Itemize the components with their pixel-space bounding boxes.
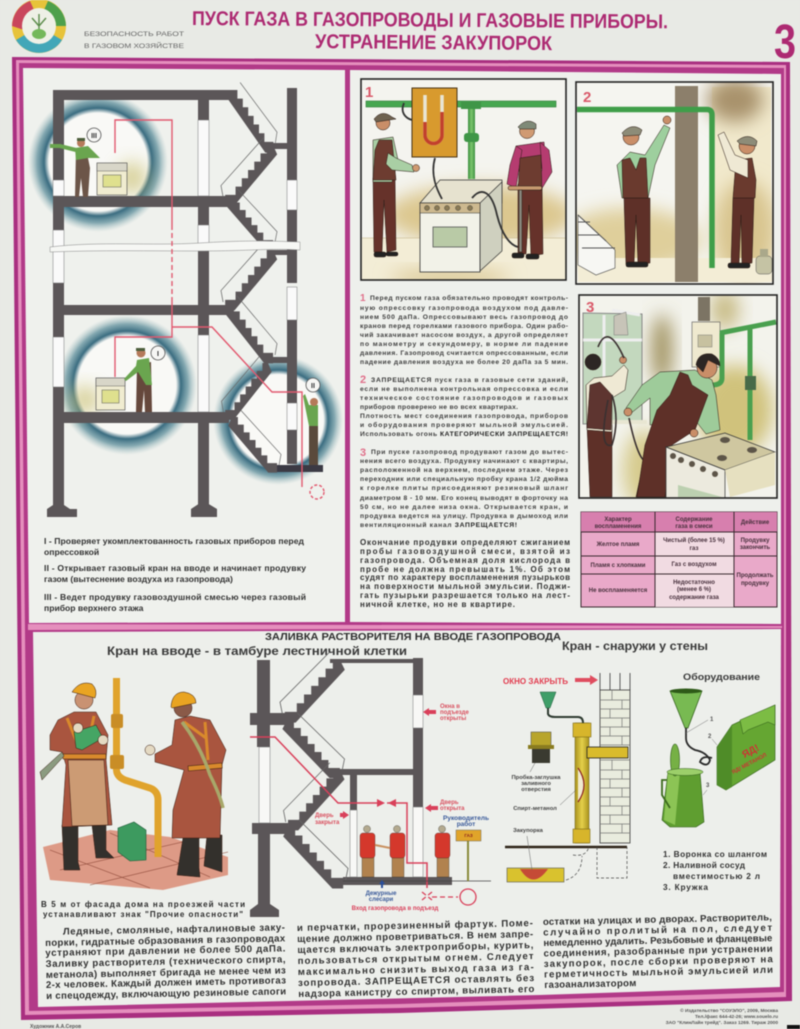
structure [47,88,323,517]
paragraph 3: переходник или специальную пробку крана 1/2 дюйма [360,475,568,483]
body text column 2 [297,918,535,1000]
window warning [503,675,598,686]
heading: valve at entrance: Кран на вводе - в тамбуре лестничной клетки [107,644,407,658]
equipment list [663,849,767,892]
labels: открыты [440,716,466,722]
table: flame characteristics: (менее 6 %) [677,587,711,593]
publisher imprint [666,1007,778,1026]
paragraph 4: пробе не должна превышать 1%. Об этом [360,565,570,574]
body text column 3 [543,912,774,991]
panel: instructions [350,70,781,624]
labels: работ [457,820,475,828]
plug [528,732,554,763]
worker right [507,121,552,259]
pipe valve [745,376,756,390]
pipe fittings [110,714,124,769]
illustration: outside riser through wall [505,673,630,882]
body text column 3: соединения, разобранные при устранении [543,944,773,959]
divider [28,624,782,630]
body text column 1: устраняют при давлении не более 500 даПа. [45,943,285,959]
left worker [40,683,114,870]
captions I-III: III - Ведет продувку газовоздушной смесью через газовый [44,592,306,602]
paragraph 1: чий закачивает насосом воздух, а другой определяет [360,331,569,339]
body text column 3: остатки на улицах и во дворах. Растворитель, [543,912,772,928]
body text column 1: 2-х человек. Каждый должен иметь противогаз [46,975,286,991]
table: flame characteristics: Содержание [676,517,713,523]
canister [118,822,146,861]
table: flame characteristics: Газ с воздухом [671,562,717,568]
paragraph 2: 2 [360,374,366,386]
highlight: apartment I [57,315,197,455]
labels: Дверь [315,813,334,819]
publisher imprint: ЗАО "КлинЛайн трейд". Заказ 1269. Тираж 2000 [666,1019,778,1026]
publisher imprint: © Издательство "СОУЭЛО", 2009, Москва [680,1007,778,1014]
ground line [343,880,491,882]
title: УСТРАНЕНИЕ ЗАКУПОРОК [315,31,553,55]
body text column 3: газоанализатором [544,978,636,991]
worker I [124,348,152,412]
body text column 2: зопровода. ЗАПРЕЩАЕТСЯ оставлять без [298,973,534,989]
note about sign [41,900,245,919]
labels: закрыта [315,820,340,826]
labels: Руководитель [443,815,489,822]
paragraph 3: 3 [360,447,366,459]
captions I-III: газом (вытеснение воздуха из газопровода) [44,574,233,584]
series label: В ГАЗОВОМ ХОЗЯЙСТВЕ [84,42,184,50]
paragraph 2: если не выполнена контрольная опрессовка и если [360,386,568,393]
captions I-III: прибор верхнего этажа [44,603,144,613]
paragraph 2 [360,374,568,438]
paragraph 1: Перед пуском газа обязательно проводят контроль- [370,294,568,302]
water heater [692,297,720,367]
warning sign: ГАЗ [464,833,473,838]
captions I-III: опрессовкой [44,547,99,557]
note about sign: устанавливают знак "Прочие опасности" [43,910,243,919]
body text column 1 [45,922,287,1002]
paragraph 1: давления. Газопровод считается опрессованным, если [360,350,568,357]
marker II [306,378,320,392]
body text column 3: закупорок, после сборки проверяют на [544,954,774,970]
table: flame characteristics: газа в смеси [675,524,713,530]
mug [662,744,704,827]
labels: подъезде [440,710,469,716]
door closed arrow [340,811,349,819]
ground [505,846,627,848]
panel: solvent filling [33,629,781,1007]
series label [84,31,184,50]
paragraph 2: и оборудования проверяют мыльной эмульсией. [360,421,568,429]
yellow riser [573,723,628,843]
highlight: stairwell II [213,355,343,485]
captions I-III [44,536,306,613]
heading: solvent filling: ЗАЛИВКА РАСТВОРИТЕЛЯ НА ВВОДЕ ГАЗОПРОВОДА [265,631,561,643]
publisher imprint: Тел./факс 644-42-26; www.souelo.ru [695,1013,778,1020]
break line [50,241,300,252]
paragraph 4: ничной клетке, но не в квартире. [360,600,515,609]
illustration 2: connecting the pipe [560,78,775,284]
worker left [617,116,671,267]
paragraph 3: продувка ведется на улицу. Продувка в дымоход или [360,513,568,520]
door open arrow [425,804,438,812]
photo corner [787,1025,800,1029]
table: flame characteristics: воспламенения [595,524,642,530]
step number 2: 2 [583,89,591,106]
window arrow [423,708,436,716]
stove III [97,163,127,195]
paragraph 2: Использовать огонь КАТЕГОРИЧЕСКИ ЗАПРЕЩАЕТСЯ! [360,431,568,438]
paragraph 2: Плотность мест соединения газопровода, приборов [360,412,568,420]
body text column 1: метанола) выполняет бригада не менее чем из [46,965,286,981]
openings [259,695,423,877]
paragraph 4: судят по характеру воспламенения пузырьков [360,573,570,582]
paragraph 3: расположенной на верхнем, последнем этаже. Через [360,466,569,474]
labels [512,774,561,834]
tiled floor [43,830,228,890]
gas route [250,737,427,888]
hoses [403,103,518,247]
diagram: stairwell with crew [250,652,491,917]
body text column 2: максимально снизить выход газа из га- [298,962,534,978]
table: flame characteristics [581,512,777,607]
marker III: III [91,133,97,140]
illustration 1: pressure test [361,79,575,286]
labels: заливного [521,781,551,787]
body text column 3: немедленно удалить. Резьбовые и фланцевые [543,933,772,949]
warning sign [456,830,481,881]
paragraph 2: техническое состояние газопроводов и газовых [360,395,568,402]
callouts: 1 [710,717,714,723]
hose [598,337,690,462]
table: flame characteristics: Недостаточно [673,580,715,586]
funnel with hose [670,688,712,765]
blue arrow [379,880,385,888]
pipe [366,101,556,107]
heading: equipment: Оборудование [683,672,760,683]
title: ПУСК ГАЗА В ГАЗОПРОВОДЫ И ГАЗОВЫЕ ПРИБОРЫ. [192,8,668,33]
window warning: ОКНО ЗАКРЫТЬ [503,677,568,686]
body text column 2: щение должно проветриваться. В нем запре- [297,929,533,945]
paragraph 3: нения всего воздуха. Продувку начинают с квартиры, [360,458,568,465]
marker II: II [311,383,315,390]
right worker [145,692,226,877]
note about sign: В 5 м от фасада дома на проезжей части [41,900,245,909]
paragraph 3: диаметром 8 - 10 мм. Его конец выводят в форточку на [360,495,568,502]
paragraph 4: гать пузырьки разрешается только на лест- [360,591,570,600]
labels [315,704,489,912]
labels: Пробка-заглушка [512,774,561,781]
paragraph 4: на поверхности мыльной эмульсии. Поджи- [360,582,570,591]
paragraph 4 [360,538,570,609]
gas pipe [577,110,712,268]
paragraph 4: Окончание продувки определяют сжиганием [360,538,570,547]
window [583,310,647,424]
poster number: 3 [774,16,796,69]
body text column 2: щается включать электроприборы, курить, [297,940,534,956]
red gas route [115,120,324,499]
funnel with tube [540,692,583,723]
stairs [578,215,615,275]
equipment list: 2. Наливной сосуд [663,860,746,870]
paragraph 3 [360,447,569,529]
labels: Дверь [440,800,459,806]
body text column 1: Ледяные, смоляные, нафталиновые заку- [63,922,285,938]
canister [717,705,775,790]
paragraph 1: падение давления воздуха не более 20 даПа за 5 мин. [360,358,568,366]
body text column 1: порки, гидратные образования в газопроводах [45,933,286,949]
title [192,8,668,55]
table: flame characteristics: закончить [740,545,770,551]
marker I: I [157,351,159,358]
paragraph 2: ЗАПРЕЩАЕТСЯ пуск газа в газовые сети зданий, [371,376,568,384]
body text column 1: и спецодежду, включающую резиновые сапоги [46,986,286,1002]
paragraph 3: к горелке плиты присоединяют резиновый шланг [360,484,568,492]
worker at window [585,354,628,497]
worker II [303,394,318,465]
paragraph 4: пробы газовоздушной смеси, взятой из [360,547,570,556]
underground dashes [566,846,627,880]
paragraph 2: приборов проверено не во всех квартирах. [360,403,518,411]
table: flame characteristics: Продувку [741,538,770,544]
equipment list: 3. Кружка [663,882,708,892]
labels: отверстия [521,787,551,793]
worker left [373,113,420,257]
captions I-III: II - Открывает газовый кран на вводе и начинает продувку [44,563,306,573]
illustration: workers at entry pipe [40,678,228,890]
callouts [686,717,717,795]
column [675,86,698,282]
canister: ЯД! [740,743,761,761]
leader lines [527,763,576,870]
marker I [151,346,165,360]
brick wall [600,673,630,843]
labels: Спирт-метанол [513,806,557,812]
callouts: 3 [706,783,710,789]
callouts: 2 [708,734,712,740]
route arrows [377,799,396,807]
stairs [221,82,281,473]
entry valve and gas main [422,889,476,905]
heading: valve outside: Кран - снаружи у стены [562,639,708,653]
paragraph 3: вентиляционный канал ЗАПРЕЩАЕТСЯ! [360,521,517,529]
instructions text [360,293,570,609]
stove [666,433,775,498]
labels: Окна в [440,704,460,710]
crew members [360,826,450,877]
table: flame characteristics: Желтое пламя [596,542,640,548]
paragraph 1: 1 [360,293,366,304]
table: flame characteristics: газ [690,546,698,552]
wall shading [560,78,775,282]
frame [579,295,777,498]
stairs [280,652,348,888]
equipment list: вместимостью 2 л [673,871,760,881]
body text column 3: герметичность мыльной эмульсией или [544,965,773,980]
worker III [50,138,100,197]
captions I-III: I - Проверяет укомплектованность газовых приборов перед [44,536,305,546]
labels: слесари [369,897,394,903]
paragraph 1: нием 500 даПа. Опрессовывают весь газопровод до [360,314,568,321]
series label: БЕЗОПАСНОСТЬ РАБОТ [84,31,184,38]
illustration: equipment [662,688,775,827]
riser with valve [461,101,481,179]
frame [576,82,773,284]
frame [361,79,566,280]
chart: building section with purge route [28,82,343,517]
table: flame characteristics: продувку [741,581,770,587]
labels: открыта [440,806,465,812]
gas pipe [116,678,158,857]
body text column 1: Заливку растворителя (технического спирта, [45,954,286,970]
step number 3: 3 [586,299,594,316]
worker right [718,132,757,268]
paragraph 1: кранов перед горелками газового прибора. Один рабо- [360,322,568,330]
table: flame characteristics: Чистый (более 15 %) [663,537,725,544]
stove [420,180,502,272]
paragraph 1 [360,293,569,366]
columns and floors [250,658,452,917]
table: flame characteristics: Пламя с хлопками [591,563,646,569]
body text column 2: пользоваться открытым огнем. Следует [298,951,534,967]
paragraph 3: 50 см, но не далее низа окна. Открывается кран, и [360,504,568,511]
logo [12,0,66,53]
body text column 3: случайно пролитый на пол, следует [543,923,773,938]
paragraph 1: по манометру и секундомеру, в норме ли падение [360,341,568,348]
paragraph 1: ную опрессовку газопровода воздухом под давле- [360,305,568,312]
wall and floor shading [362,185,575,286]
labels: Закупорка [513,828,544,834]
body text column 2: и перчатки, прорезиненный фартук. Поме- [297,918,533,934]
paragraph 4: газопровода. Объемная доля кислорода в [360,556,570,565]
blocked pipe [507,868,564,882]
body text column 2: надзора канистру со спиртом, выливать его [298,984,535,1000]
canister [756,249,772,274]
equipment list: 1. Воронка со шлангом [663,849,767,859]
large worker [624,354,720,497]
labels: Дежурные [366,891,397,897]
manometer board [412,88,457,157]
table: flame characteristics: Продолжать [736,573,774,579]
windows [53,120,297,430]
table: flame characteristics: Действие [741,519,770,526]
table: flame characteristics: Характер [604,517,632,523]
green pipes [712,322,776,440]
step number 1: 1 [365,84,373,101]
table: flame characteristics: содержание газа [669,595,720,601]
canister: ЯД! МЕТАНОЛ [731,752,768,776]
paragraph 3: При пуске газопровод продувают газом до вытес- [371,449,568,456]
labels: Вход газопровода в подъезд [352,906,439,912]
olive shading in circles [71,162,146,414]
stove I [96,378,125,410]
table: flame characteristics: Не воспламеняется [589,588,648,594]
highlight: apartment III [28,92,168,232]
wall shading [623,290,773,510]
marker III [87,128,101,142]
illustration 3: purging through hose [579,290,777,510]
panel: building scheme [23,68,345,623]
